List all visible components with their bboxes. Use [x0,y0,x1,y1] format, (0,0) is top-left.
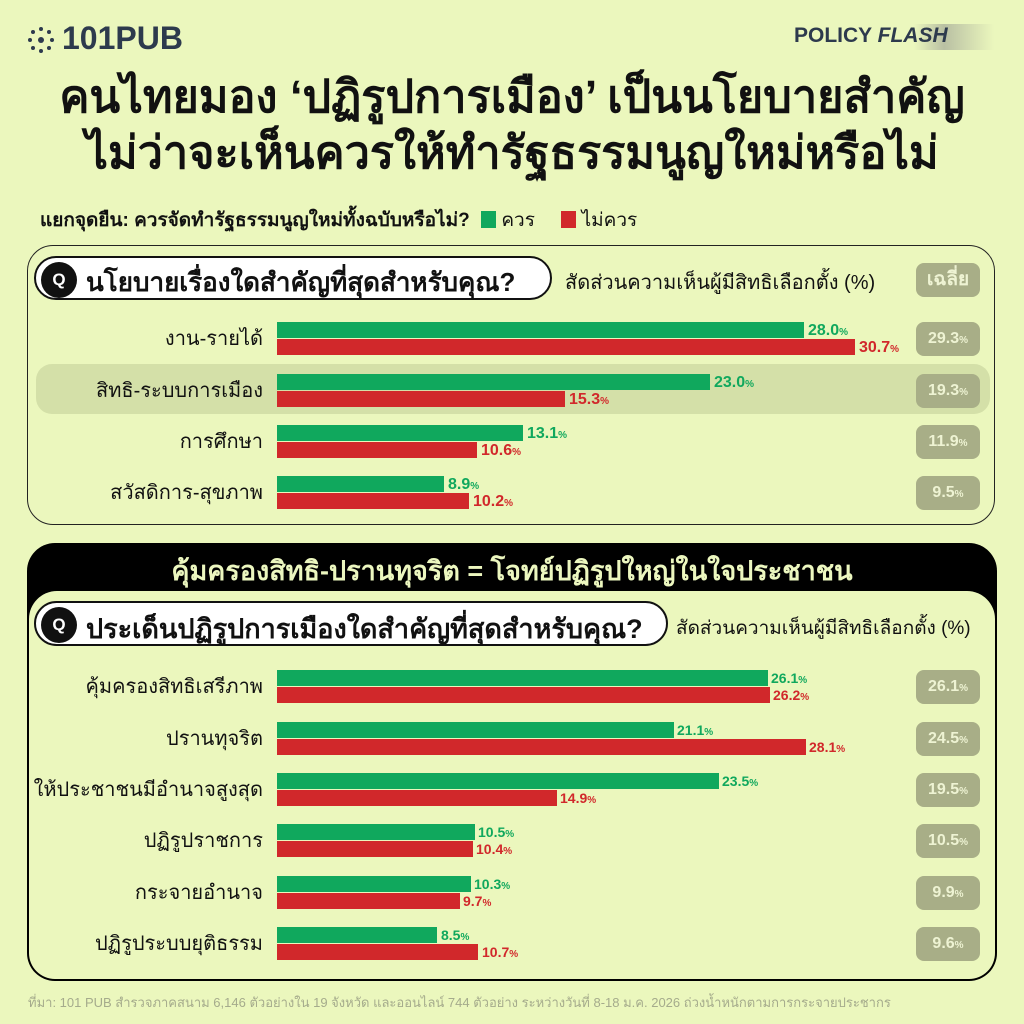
row: ปรานทุจริต: 28.1% [809,739,845,755]
panel: policy importance [27,245,995,525]
logo: 101PUB: 101PUB [62,20,183,56]
row: กระจายอำนาจ: 10.3% [474,876,510,892]
row: ให้ประชาชนมีอำนาจสูงสุด: 19.5% [928,781,968,798]
row: ปรานทุจริต: ปรานทุจริต [166,728,263,750]
row: ปฏิรูปราชการ: 10.4% [476,841,512,857]
row: กระจายอำนาจ: 9.7% [463,893,491,909]
row: ปฏิรูประบบยุติธรรม: 10.7% [482,944,518,960]
legend: แยกจุดยืน: ควรจัดทำรัฐธรรมนูญใหม่ทั้งฉบับหรือไม่? ควร ไม่ควร [40,210,637,231]
question pill 2: Q [52,615,66,634]
highlight row [36,364,990,414]
avg header [916,263,980,297]
row: ให้ประชาชนมีอำนาจสูงสุด [34,773,980,807]
row: การศึกษา: 11.9% [928,433,968,450]
inner panel [29,591,995,979]
avg header: เฉลี่ย [927,269,969,290]
row: สิทธิ-ระบบการเมือง: 23.0% [714,374,754,391]
row: ปฏิรูปราชการ: 10.5% [478,824,514,840]
row: สวัสดิการ-สุขภาพ [110,476,980,510]
panel: reform issues [27,543,997,981]
row: คุ้มครองสิทธิเสรีภาพ: 26.1% [771,670,807,686]
question pill 1 [34,256,552,300]
row: ให้ประชาชนมีอำนาจสูงสุด: 23.5% [722,773,758,789]
row: คุ้มครองสิทธิเสรีภาพ: 26.1% [928,678,968,695]
row: สิทธิ-ระบบการเมือง: 19.3% [928,382,968,399]
row: งาน-รายได้: 28.0% [808,322,848,339]
row: สิทธิ-ระบบการเมือง [96,374,980,408]
row: การศึกษา: 13.1% [527,425,567,442]
source note: ที่มา: 101 PUB สำรวจภาคสนาม 6,146 ตัวอย่างใน 19 จังหวัด และออนไลน์ 744 ตัวอย่าง ระหว่างวันที่ 8-18 ม.ค. 2026 ถ่วงน้ำหนักตามการกระจายประชากร [28,995,891,1010]
row: การศึกษา: การศึกษา [180,431,263,453]
row: งาน-รายได้ [165,322,980,356]
row: คุ้มครองสิทธิเสรีภาพ: คุ้มครองสิทธิเสรีภาพ [86,676,263,698]
row: ปรานทุจริต: 21.1% [677,722,713,738]
title: คนไทยมอง ‘ปฏิรูปการเมือง’ เป็นนโยบายสำคัญ [59,71,965,122]
question pill 2 [34,601,668,646]
row: กระจายอำนาจ: กระจายอำนาจ [135,882,263,904]
axis caption 2: สัดส่วนความเห็นผู้มีสิทธิเลือกตั้ง (%) [676,618,971,639]
panel header: คุ้มครองสิทธิ-ปรานทุจริต = โจทย์ปฏิรูปใหญ่ในใจประชาชน [171,556,853,586]
row: ปฏิรูประบบยุติธรรม: 9.6% [932,935,964,952]
row: ปฏิรูประบบยุติธรรม [95,927,980,961]
row: งาน-รายได้: งาน-รายได้ [165,328,263,350]
row: งาน-รายได้: 30.7% [859,339,899,356]
row: กระจายอำนาจ [135,876,980,910]
row: สวัสดิการ-สุขภาพ: สวัสดิการ-สุขภาพ [110,482,263,504]
row: การศึกษา: 10.6% [481,442,521,459]
row: ให้ประชาชนมีอำนาจสูงสุด: 14.9% [560,790,596,806]
title [59,69,965,182]
row: งาน-รายได้: 29.3% [928,330,968,347]
row: สวัสดิการ-สุขภาพ: 9.5% [932,484,964,501]
row: ปฏิรูประบบยุติธรรม: 8.5% [441,927,469,943]
row: คุ้มครองสิทธิเสรีภาพ [86,670,980,704]
brand: POLICY FLASH [794,24,994,50]
row: ปฏิรูปราชการ: ปฏิรูปราชการ [144,830,263,852]
axis caption 1: สัดส่วนความเห็นผู้มีสิทธิเลือกตั้ง (%) [565,272,875,294]
row: ปรานทุจริต [166,722,980,756]
question pill 2: ประเด็นปฏิรูปการเมืองใดสำคัญที่สุดสำหรับคุณ? [86,614,643,644]
row: สวัสดิการ-สุขภาพ: 8.9% [448,476,479,493]
row: ปรานทุจริต: 24.5% [928,730,968,747]
icon: logo burst [28,27,54,53]
row: คุ้มครองสิทธิเสรีภาพ: 26.2% [773,687,809,703]
question pill 1: นโยบายเรื่องใดสำคัญที่สุดสำหรับคุณ? [86,267,515,297]
row: สิทธิ-ระบบการเมือง: สิทธิ-ระบบการเมือง [96,380,263,402]
row: กระจายอำนาจ: 9.9% [932,884,964,901]
row: ปฏิรูประบบยุติธรรม: ปฏิรูประบบยุติธรรม [95,933,263,955]
row: สิทธิ-ระบบการเมือง: 15.3% [569,391,609,408]
row: การศึกษา [180,425,980,459]
title: ไม่ว่าจะเห็นควรให้ทำรัฐธรรมนูญใหม่หรือไม่ [85,127,939,178]
row: ปฏิรูปราชการ: 10.5% [928,832,968,849]
question pill 1: Q [52,270,66,289]
row: ปฏิรูปราชการ [144,824,980,858]
row: ให้ประชาชนมีอำนาจสูงสุด: ให้ประชาชนมีอำนาจสูงสุด [34,779,263,801]
row: สวัสดิการ-สุขภาพ: 10.2% [473,493,513,510]
brand: POLICY FLASH: POLICY FLASH [794,24,948,47]
